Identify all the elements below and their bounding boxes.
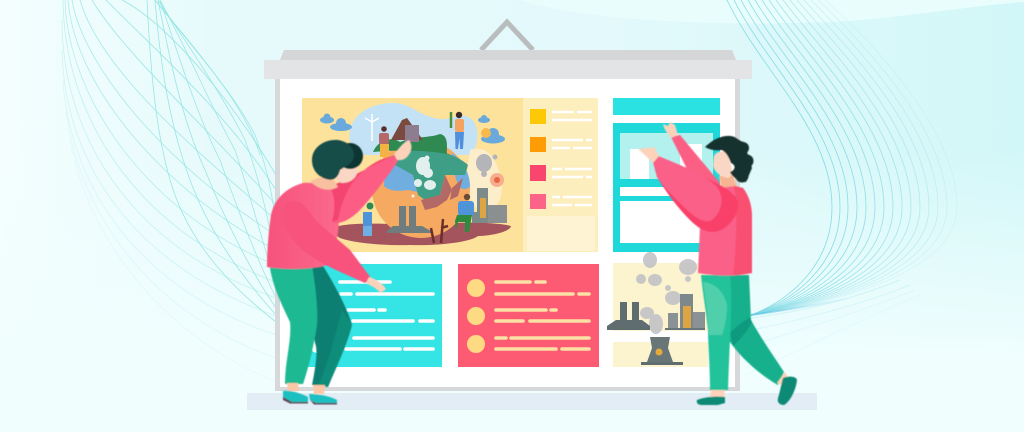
hair bbox=[705, 136, 754, 182]
icon: windmill bbox=[365, 114, 379, 141]
legend item 2 bbox=[530, 137, 592, 152]
hanger bbox=[481, 22, 533, 50]
green hills bbox=[373, 134, 447, 154]
panel: teal list bbox=[302, 264, 442, 367]
neck bbox=[719, 172, 738, 192]
panel: teal layout box bbox=[613, 123, 720, 252]
board frame bbox=[275, 79, 740, 391]
factory bbox=[387, 206, 431, 233]
shoes bbox=[283, 391, 337, 404]
panel: legend bbox=[523, 98, 598, 252]
back leg bbox=[720, 275, 784, 385]
building bbox=[405, 125, 419, 142]
person: top left bbox=[379, 126, 389, 157]
icon: smoke clouds bbox=[636, 252, 697, 334]
shoes bbox=[697, 377, 797, 405]
left leg front bbox=[270, 265, 317, 384]
hand upper bbox=[394, 140, 411, 160]
presentation board bbox=[264, 22, 752, 391]
panel: pollution illustration bbox=[607, 252, 708, 367]
left leg shade bbox=[318, 310, 352, 387]
city tower bbox=[472, 188, 507, 223]
legend item 4 bbox=[530, 194, 592, 209]
legend item 3 bbox=[530, 165, 592, 181]
person: lower right bbox=[455, 194, 474, 232]
face bbox=[332, 166, 358, 183]
hand back bbox=[663, 122, 678, 138]
person: right presenter bbox=[638, 122, 797, 405]
roller bar bbox=[264, 50, 752, 79]
lower arm bbox=[283, 201, 371, 283]
torso bbox=[698, 186, 752, 276]
mountain bbox=[391, 118, 423, 140]
left wave mesh bbox=[62, 0, 276, 382]
torso bbox=[267, 183, 339, 269]
icon: nuclear plant bbox=[641, 337, 683, 365]
person: top right bbox=[451, 112, 464, 149]
dead trees bbox=[431, 219, 448, 243]
ankles bbox=[710, 372, 788, 397]
hand front bbox=[638, 147, 659, 163]
front arm bbox=[653, 156, 738, 232]
left leg back bbox=[312, 264, 352, 387]
panel: red list bbox=[458, 264, 599, 367]
neck bbox=[310, 174, 338, 190]
person: left presenter bbox=[267, 140, 411, 405]
ankles bbox=[287, 383, 325, 394]
icon: clouds bbox=[320, 114, 505, 144]
ground bbox=[333, 223, 511, 245]
upper arm bbox=[330, 155, 398, 223]
back arm bbox=[671, 135, 720, 197]
legend item 1 bbox=[530, 109, 592, 124]
icon: smoke bbox=[476, 154, 498, 177]
icon: sun bbox=[481, 128, 491, 138]
icon: factory bbox=[607, 302, 650, 330]
illustration: blue sky blob bbox=[349, 103, 478, 155]
board sheet bbox=[280, 79, 735, 387]
hand lower bbox=[366, 277, 386, 293]
floor bbox=[247, 393, 817, 410]
icon: radiation sign bbox=[490, 173, 504, 187]
globe bbox=[372, 140, 470, 238]
illustration: pale haze bbox=[465, 149, 502, 215]
person: lower left bbox=[363, 202, 374, 236]
front leg bbox=[701, 275, 731, 390]
right wave lines bbox=[727, 0, 957, 375]
face bbox=[713, 151, 732, 178]
panel: teal header bar bbox=[613, 98, 720, 115]
hair bbox=[312, 140, 363, 180]
icon: city bbox=[665, 294, 705, 330]
panel: yellow illustration bbox=[302, 98, 523, 252]
